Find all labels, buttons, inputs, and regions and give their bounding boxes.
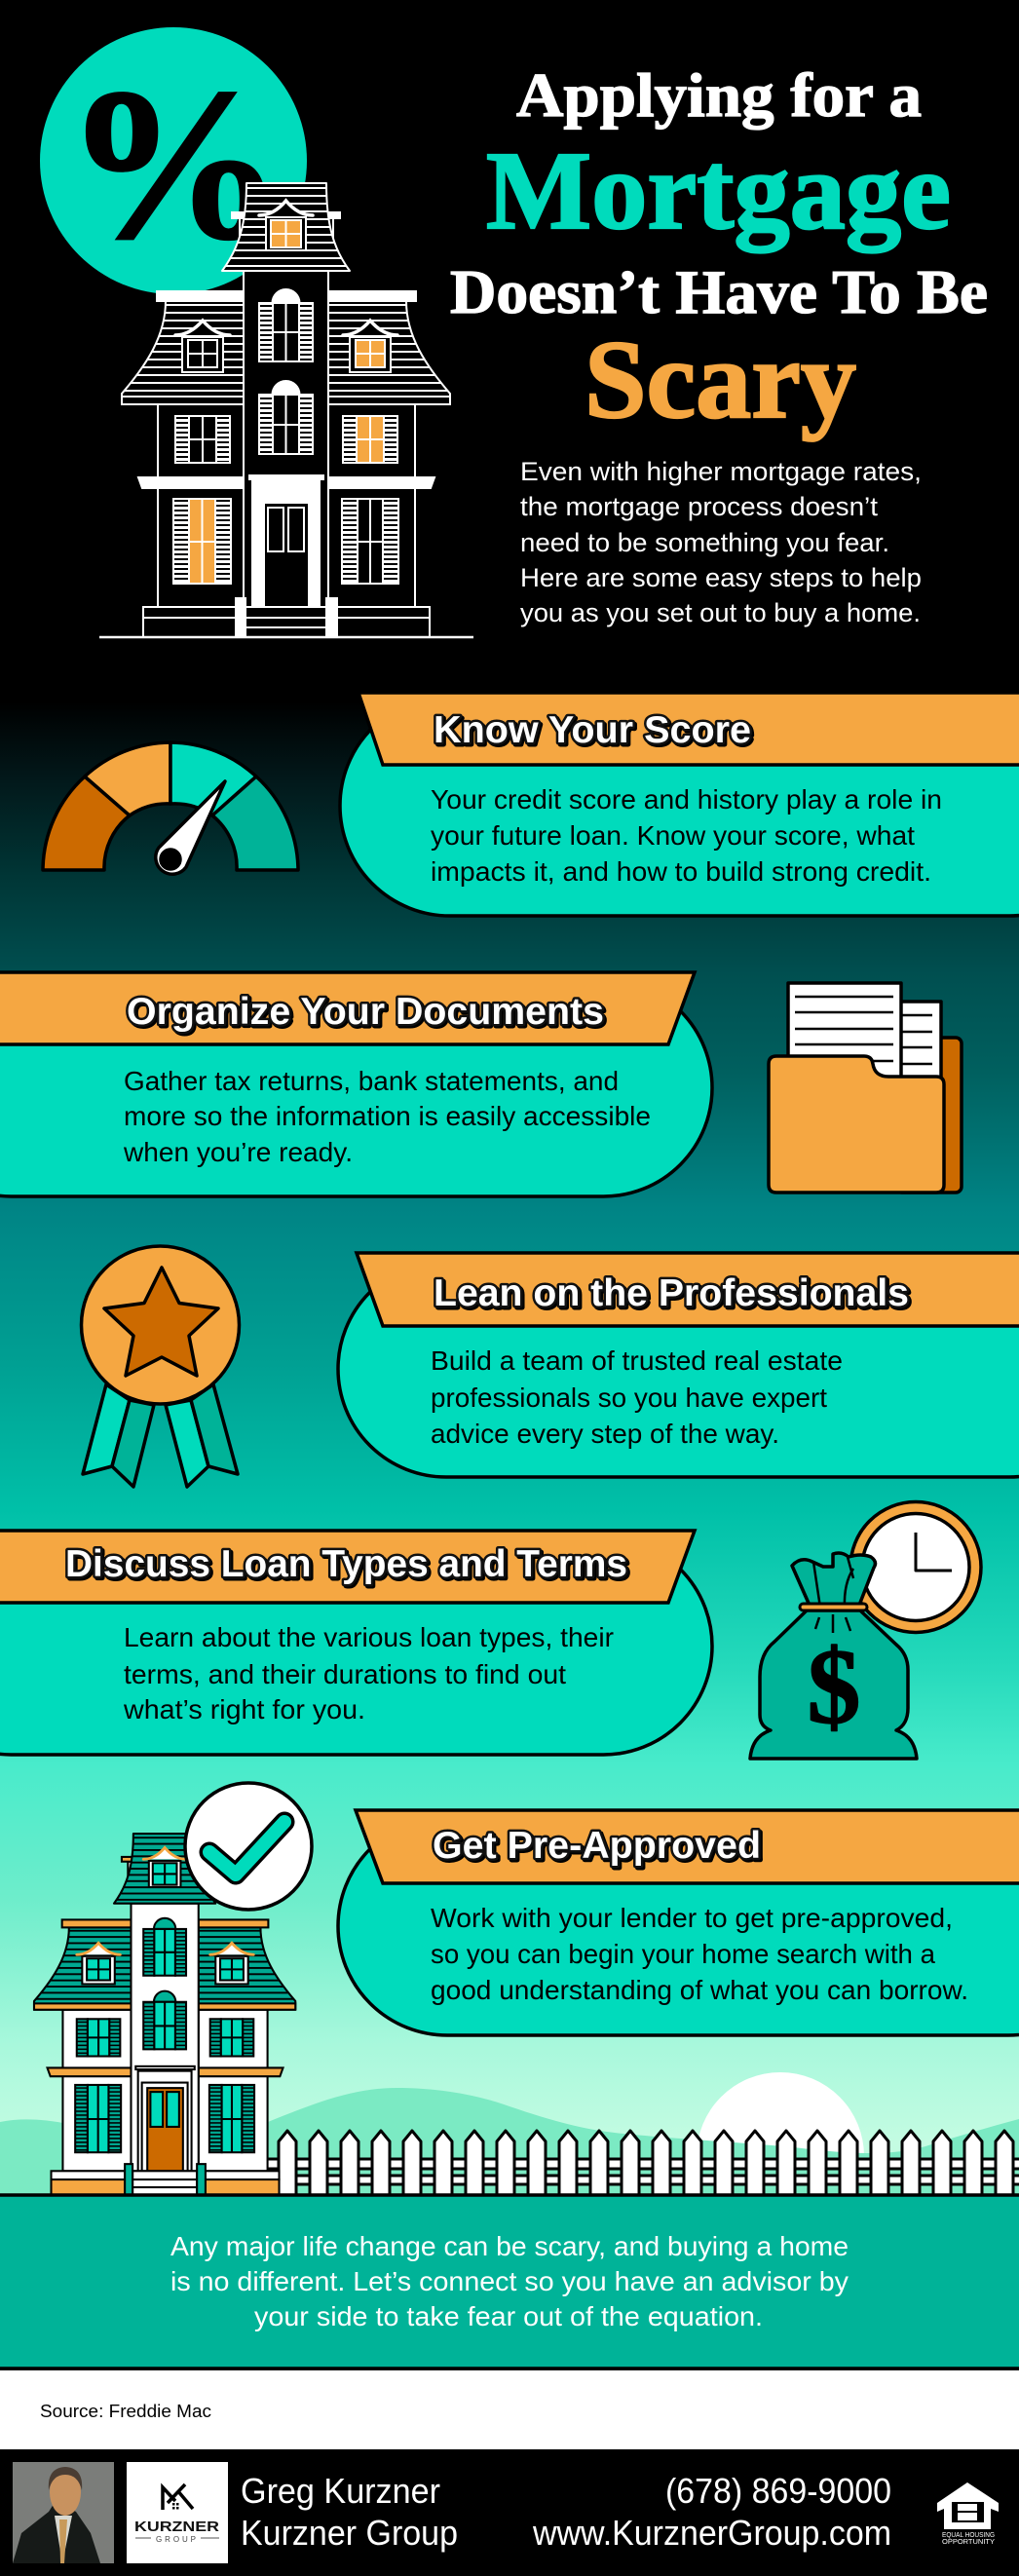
- intro paragraph: need to be something you fear.: [520, 528, 889, 557]
- source note: [0, 2370, 1019, 2449]
- closing message band: your side to take fear out of the equation.: [254, 2301, 763, 2331]
- contact details: [532, 2471, 891, 2553]
- panel: discuss loan types and terms: terms, and their durations to find out: [124, 1659, 566, 1689]
- icon: equal housing opportunity: [937, 2482, 999, 2546]
- panel: organize your documents: [0, 972, 712, 1196]
- intro paragraph: Here are some easy steps to help: [520, 563, 922, 592]
- icon: credit score gauge: [43, 742, 298, 874]
- panel: get pre-approved: so you can begin your home search with a: [431, 1939, 935, 1969]
- panel: know your score: Your credit score and history play a role in: [431, 784, 942, 814]
- closing message band: is no different. Let’s connect so you have an advisor by: [170, 2266, 849, 2296]
- contact details: (678) 869-9000: [665, 2471, 891, 2511]
- icon: equal housing opportunity: OPPORTUNITY: [942, 2537, 995, 2546]
- title: Applying for a: [516, 60, 922, 130]
- intro paragraph: [520, 457, 922, 627]
- icon: check mark badge: [185, 1783, 312, 1910]
- agent name: Greg Kurzner: [241, 2471, 440, 2511]
- panel: lean on the professionals: [338, 1253, 1019, 1477]
- intro paragraph: you as you set out to buy a home.: [520, 598, 921, 627]
- title: Mortgage: [486, 129, 951, 252]
- icon: money bag and clock: [750, 1502, 981, 1759]
- panel: lean on the professionals: advice every step of the way.: [431, 1419, 779, 1449]
- intro paragraph: the mortgage process doesn’t: [520, 492, 879, 521]
- panel: discuss loan types and terms: Discuss Loan Types and Terms: [65, 1543, 627, 1585]
- panel: get pre-approved: Get Pre-Approved: [433, 1825, 761, 1867]
- title: [450, 60, 988, 441]
- closing message band: [0, 2195, 1019, 2368]
- panel: know your score: your future loan. Know your score, what: [431, 820, 915, 851]
- panel: discuss loan types and terms: [0, 1531, 712, 1755]
- panel: discuss loan types and terms: Learn about the various loan types, their: [124, 1622, 614, 1652]
- footer: [0, 2449, 1019, 2576]
- closing message band: Any major life change can be scary, and buying a home: [170, 2231, 849, 2261]
- scenery: hills and sun: [0, 2072, 1019, 2240]
- icon: equal housing opportunity: EQUAL HOUSING: [942, 2530, 995, 2539]
- agent name: Kurzner Group: [241, 2513, 458, 2553]
- panel: get pre-approved: Work with your lender to get pre-approved,: [431, 1903, 953, 1933]
- source note: Source: Freddie Mac: [40, 2402, 211, 2421]
- panel: organize your documents: more so the information is easily accessible: [124, 1101, 651, 1131]
- green house illustration: [34, 1834, 295, 2195]
- panel: get pre-approved: [338, 1810, 1019, 2035]
- intro paragraph: Even with higher mortgage rates,: [520, 457, 922, 486]
- panel: know your score: [340, 693, 1019, 916]
- contact details: www.KurznerGroup.com: [532, 2513, 891, 2553]
- panel: lean on the professionals: Lean on the Professionals: [434, 1272, 909, 1314]
- panel: lean on the professionals: Build a team of trusted real estate: [431, 1345, 843, 1376]
- percent badge: %: [64, 45, 284, 284]
- gradient background: [0, 682, 1019, 2202]
- panel: lean on the professionals: professionals so you have expert: [431, 1383, 827, 1413]
- haunted house illustration: [99, 183, 473, 637]
- icon: money bag and clock: $: [807, 1627, 861, 1746]
- panel: know your score: impacts it, and how to build strong credit.: [431, 856, 931, 887]
- panel: organize your documents: Organize Your Documents: [127, 991, 604, 1033]
- panel: know your score: Know Your Score: [434, 709, 751, 751]
- header background: [0, 0, 1019, 694]
- company logo: [127, 2462, 228, 2563]
- agent name: [241, 2471, 458, 2553]
- picket fence: [263, 2131, 1019, 2195]
- icon: star medal: [82, 1246, 240, 1487]
- panel: get pre-approved: good understanding of what you can borrow.: [431, 1975, 968, 2005]
- company logo: KURZNER: [134, 2519, 219, 2535]
- company logo: GROUP: [156, 2535, 196, 2544]
- title: Doesn’t Have To Be: [450, 257, 988, 326]
- panel: organize your documents: Gather tax returns, bank statements, and: [124, 1066, 619, 1096]
- panel: organize your documents: when you’re ready.: [123, 1137, 353, 1167]
- icon: document folder: [769, 983, 962, 1193]
- panel: discuss loan types and terms: what’s right for you.: [123, 1694, 365, 1724]
- agent photo: [13, 2462, 114, 2563]
- title: Scary: [585, 318, 856, 441]
